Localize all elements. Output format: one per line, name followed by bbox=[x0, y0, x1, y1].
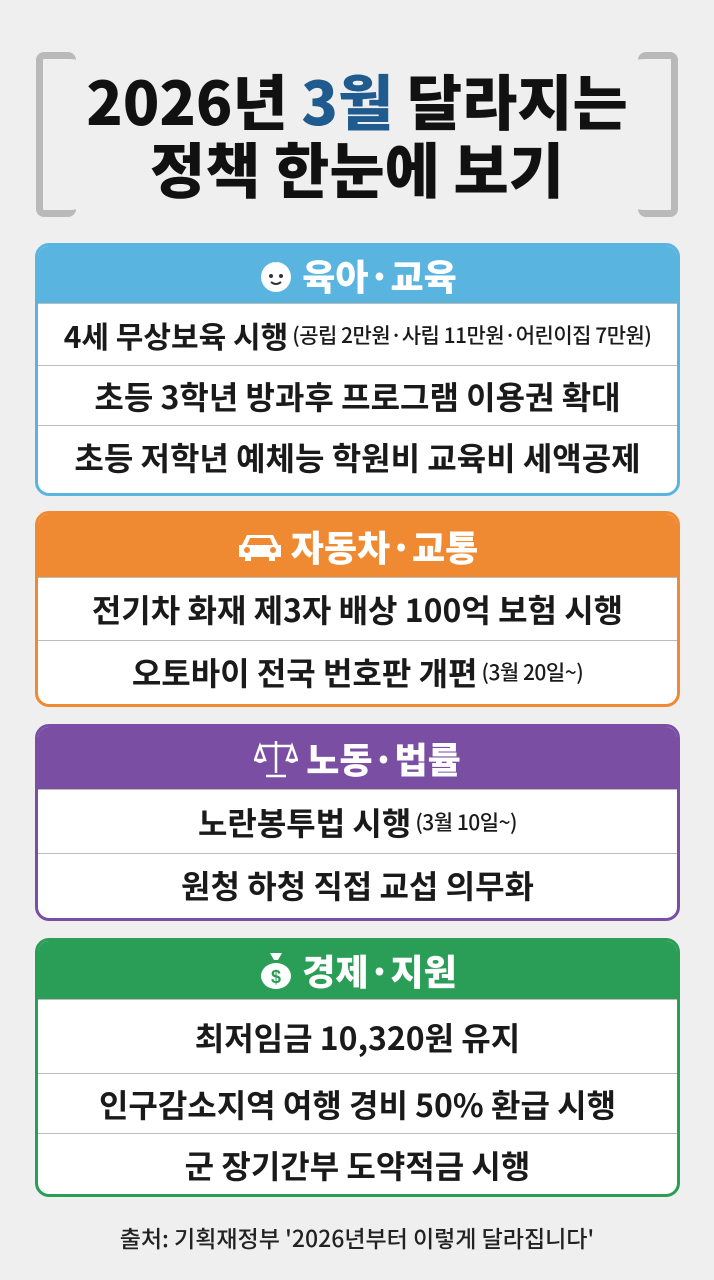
source: 출처: 기획재정부 '2026년부터 이렇게 달라집니다' bbox=[120, 1220, 594, 1254]
header: 경제·지원: 경제·지원 bbox=[302, 944, 457, 996]
item: 오토바이 전국 번호판 개편 bbox=[132, 648, 477, 694]
panel: 육아·교육 bbox=[35, 243, 680, 496]
item bbox=[38, 425, 677, 487]
icon: money bag bbox=[261, 953, 291, 989]
panel: 자동차·교통 bbox=[35, 511, 680, 707]
item: 최저임금 10,320원 유지 bbox=[195, 1014, 520, 1060]
item: 군 장기간부 도약적금 시행 bbox=[185, 1142, 530, 1188]
icon: car bbox=[239, 535, 281, 561]
item: 4세 무상보육 시행 bbox=[64, 312, 288, 356]
item bbox=[38, 640, 677, 702]
item bbox=[38, 1133, 677, 1195]
item: 초등 저학년 예체능 학원비 교육비 세액공제 bbox=[74, 434, 641, 480]
item: 전기차 화재 제3자 배상 100억 보험 시행 bbox=[92, 586, 623, 632]
item bbox=[38, 999, 677, 1073]
item: (3월 20일~) bbox=[481, 656, 583, 686]
title: 2026년 3월 달라지는 bbox=[86, 56, 628, 143]
item: (3월 10일~) bbox=[415, 806, 517, 836]
item bbox=[38, 789, 677, 853]
item: 원청 하청 직접 교섭 의무화 bbox=[181, 862, 534, 908]
header: 육아·교육: 육아·교육 bbox=[302, 248, 457, 300]
icon: money bag: $ bbox=[271, 967, 281, 987]
title: 정책 한눈에 보기 bbox=[150, 124, 564, 211]
header: 노동·법률: 노동·법률 bbox=[306, 732, 461, 784]
icon: scales bbox=[254, 741, 298, 778]
panel: 노동·법률 bbox=[35, 724, 680, 921]
item: 노란봉투법 시행 bbox=[198, 798, 411, 844]
header: 노동·법률 bbox=[38, 727, 677, 789]
header: 경제·지원 bbox=[38, 941, 677, 999]
bracket left bbox=[36, 52, 76, 217]
panel: 경제·지원 bbox=[35, 938, 680, 1197]
header: 자동차·교통: 자동차·교통 bbox=[291, 520, 478, 572]
header: 육아·교육 bbox=[38, 246, 677, 303]
header: 자동차·교통 bbox=[38, 514, 677, 577]
item bbox=[38, 1073, 677, 1133]
item bbox=[38, 303, 677, 365]
item: 초등 3학년 방과후 프로그램 이용권 확대 bbox=[94, 372, 621, 418]
item: (공립 2만원·사립 11만원·어린이집 7만원) bbox=[292, 320, 651, 350]
item bbox=[38, 365, 677, 425]
title bbox=[86, 56, 628, 211]
item: 인구감소지역 여행 경비 50% 환급 시행 bbox=[99, 1080, 616, 1126]
item bbox=[38, 577, 677, 640]
item bbox=[38, 853, 677, 915]
icon: baby bbox=[261, 262, 291, 292]
bracket right bbox=[638, 52, 678, 217]
